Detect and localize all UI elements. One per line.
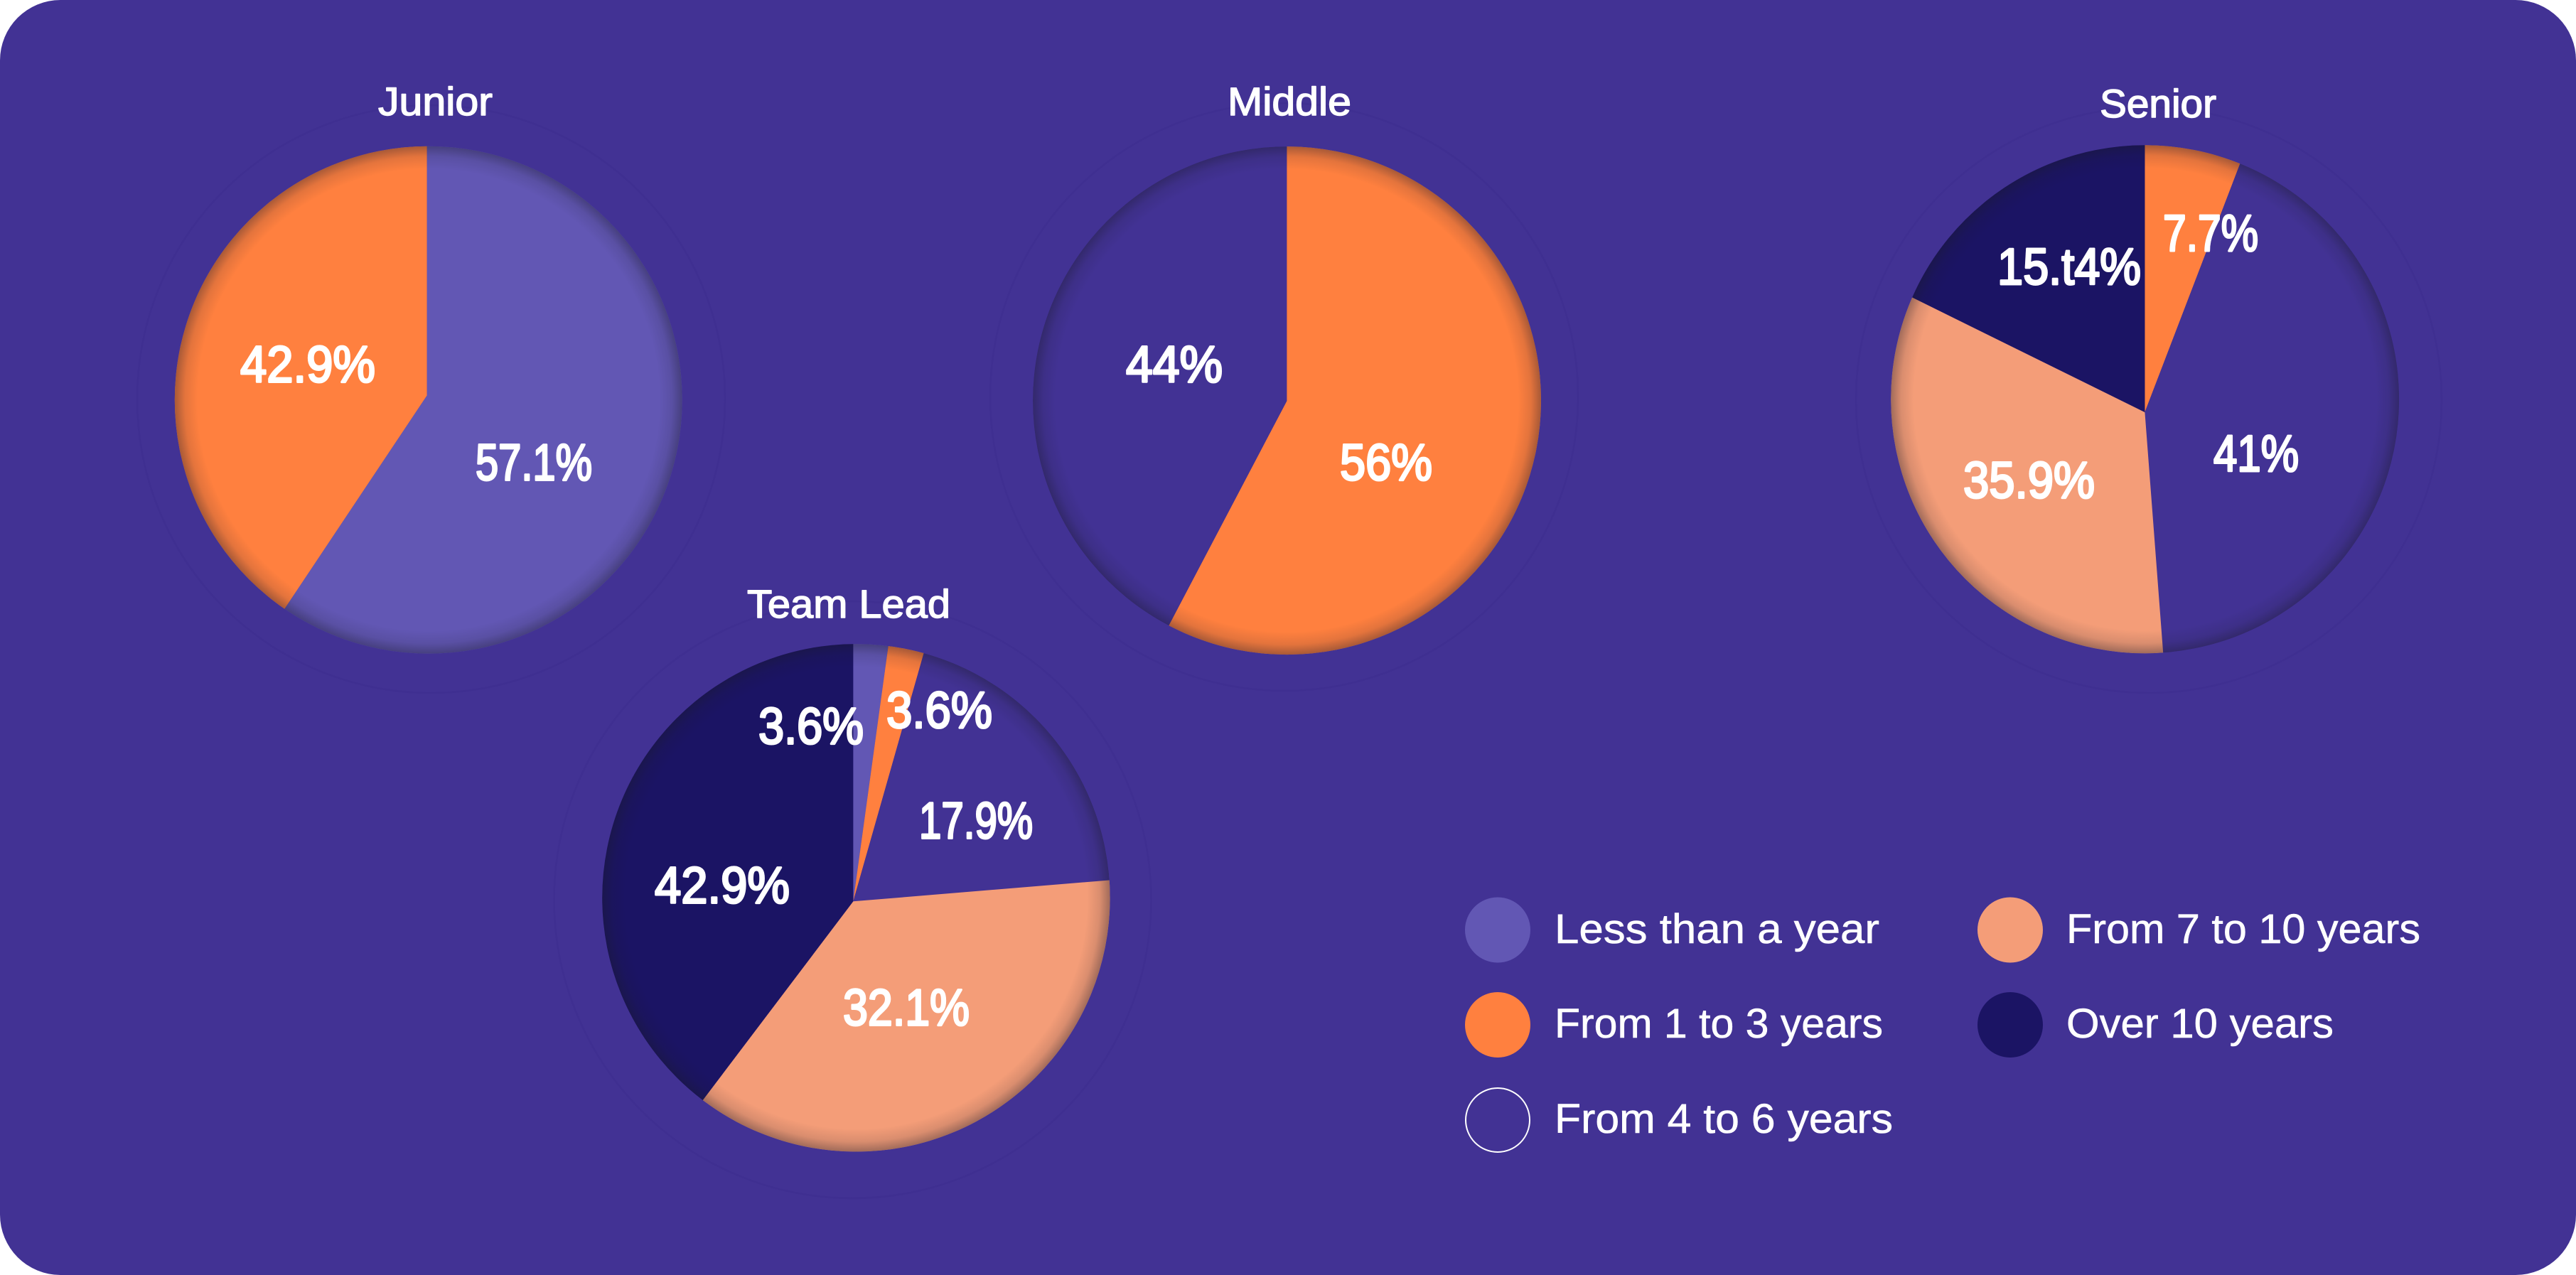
panel: Middle [1033, 85, 1541, 655]
value: 42.9%: 42.9% [655, 858, 790, 915]
heading: Middle: Middle [1228, 79, 1351, 124]
pie chart: Senior [1891, 145, 2399, 654]
value: 42.9%: 42.9% [240, 337, 375, 394]
panel: Team Lead [602, 588, 1110, 1151]
value: 7.7%: 7.7% [2163, 205, 2258, 262]
panel: Senior [1891, 88, 2399, 654]
value: 41%: 41% [2213, 426, 2299, 483]
legend item: From 1 to 3 years [1465, 992, 1883, 1058]
value: 3.6% left: 3.6% [758, 698, 864, 755]
value: 35.9%: 35.9% [1963, 452, 2095, 509]
legend item: From 7 to 10 years [1977, 897, 2420, 962]
heading: Team Lead: Team Lead [747, 581, 950, 626]
legend [1465, 897, 2420, 1152]
legend item: From 7 to 10 years: From 7 to 10 years [2066, 906, 2420, 952]
legend item: Less than a year [1465, 897, 1879, 962]
heading: Junior: Junior [378, 79, 493, 124]
legend item: From 4 to 6 years [1466, 1088, 1893, 1152]
panel: Junior [175, 85, 682, 654]
value: 56%: 56% [1340, 435, 1432, 492]
value: 15.t4%: 15.t4% [1997, 239, 2141, 296]
value: 32.1%: 32.1% [843, 980, 970, 1037]
legend item: From 4 to 6 years: From 4 to 6 years [1555, 1096, 1893, 1142]
pie chart: Junior [175, 146, 682, 654]
value: 3.6% right: 3.6% [886, 682, 992, 739]
value: 44%: 44% [1126, 337, 1223, 394]
heading: Senior: Senior [2100, 81, 2216, 126]
legend item: Over 10 years [1977, 992, 2334, 1058]
legend item: Less than a year: Less than a year [1555, 906, 1879, 952]
value: 17.9%: 17.9% [919, 793, 1033, 850]
legend item: From 1 to 3 years: From 1 to 3 years [1555, 1001, 1883, 1047]
pie chart: Team Lead [602, 644, 1110, 1151]
pie chart: Middle [1033, 146, 1541, 655]
legend item: Over 10 years: Over 10 years [2066, 1001, 2334, 1047]
value: 57.1%: 57.1% [476, 435, 592, 492]
